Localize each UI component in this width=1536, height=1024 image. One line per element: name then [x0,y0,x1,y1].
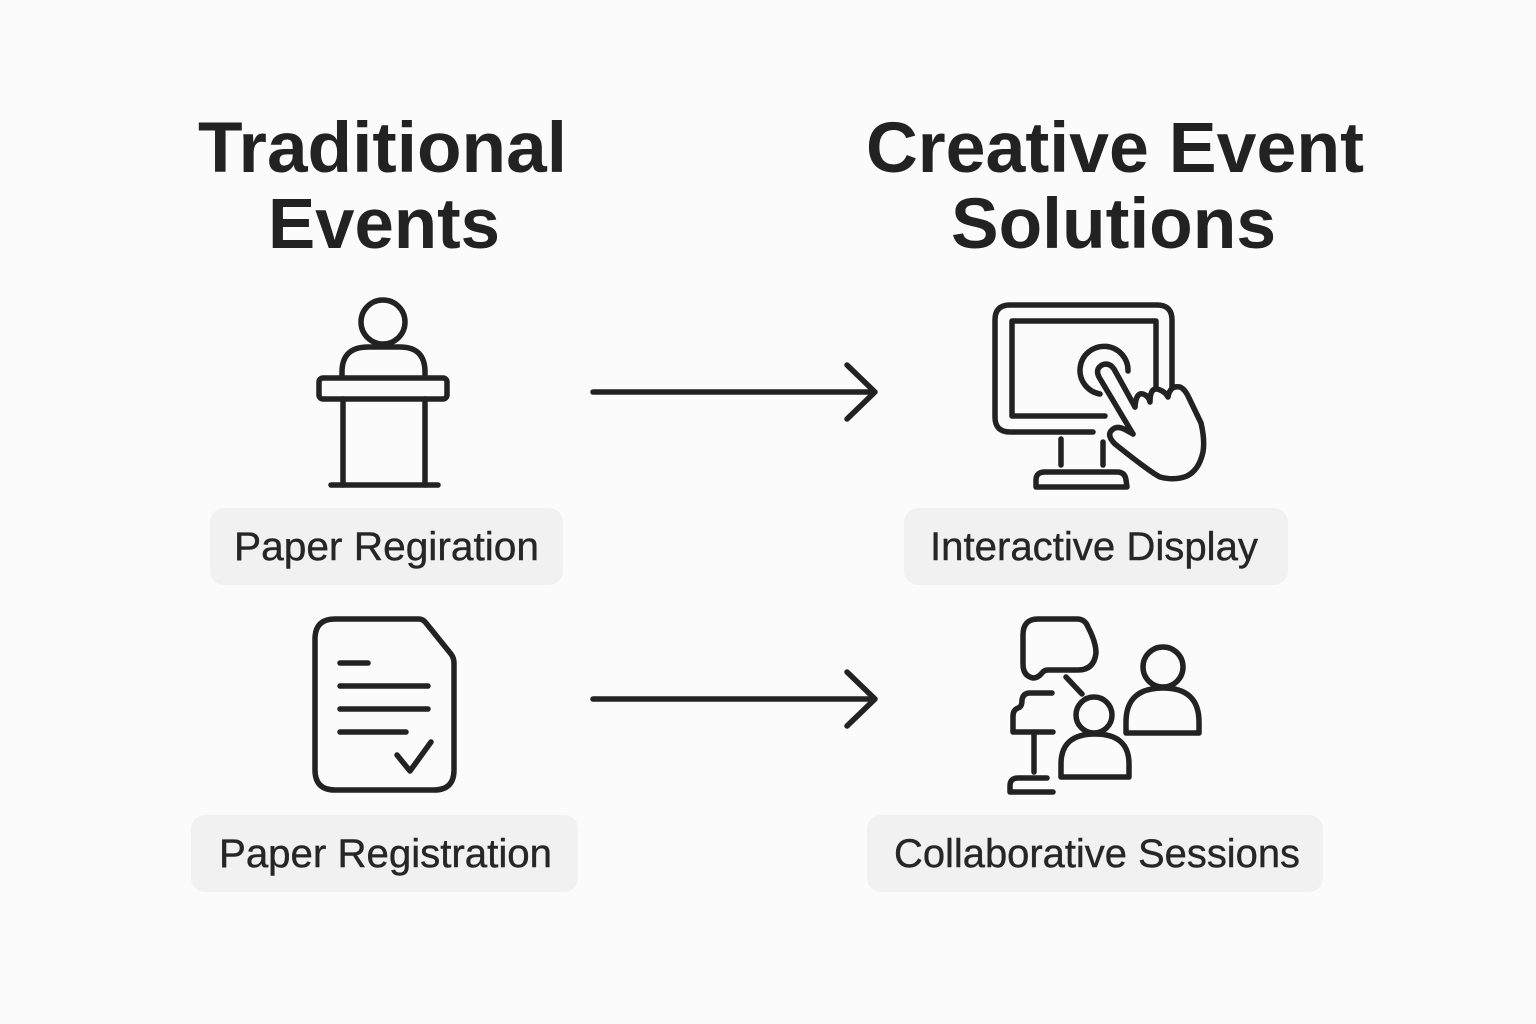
icon: speaker at podium [319,300,447,485]
label pill: Interactive Display [904,508,1288,585]
heading: Traditional Events [198,109,567,264]
label pill: Paper Regiration [210,508,563,585]
arrow: podium to interactive display [593,365,875,419]
icon: touch screen monitor [995,305,1204,487]
arrow: paper registration to collaborative sessions [593,672,875,726]
heading: Traditional Events: Events [268,185,500,264]
label pill: Paper Registration: Paper Registration [219,832,552,876]
heading: Traditional Events: Traditional [198,109,567,188]
icon: collaborative group with speech bubble [1010,619,1199,792]
label pill: Interactive Display: Interactive Display [930,525,1258,569]
heading: Creative Event Solutions [866,109,1364,264]
label pill: Paper Registration [191,815,578,892]
icon: document with check mark [315,619,454,790]
heading: Creative Event Solutions: Solutions [951,185,1276,264]
heading: Creative Event Solutions: Creative Event [866,109,1364,188]
label pill: Collaborative Sessions: Collaborative Sessions [894,832,1300,876]
label pill: Paper Regiration: Paper Regiration [234,525,539,569]
label pill: Collaborative Sessions [867,815,1323,892]
